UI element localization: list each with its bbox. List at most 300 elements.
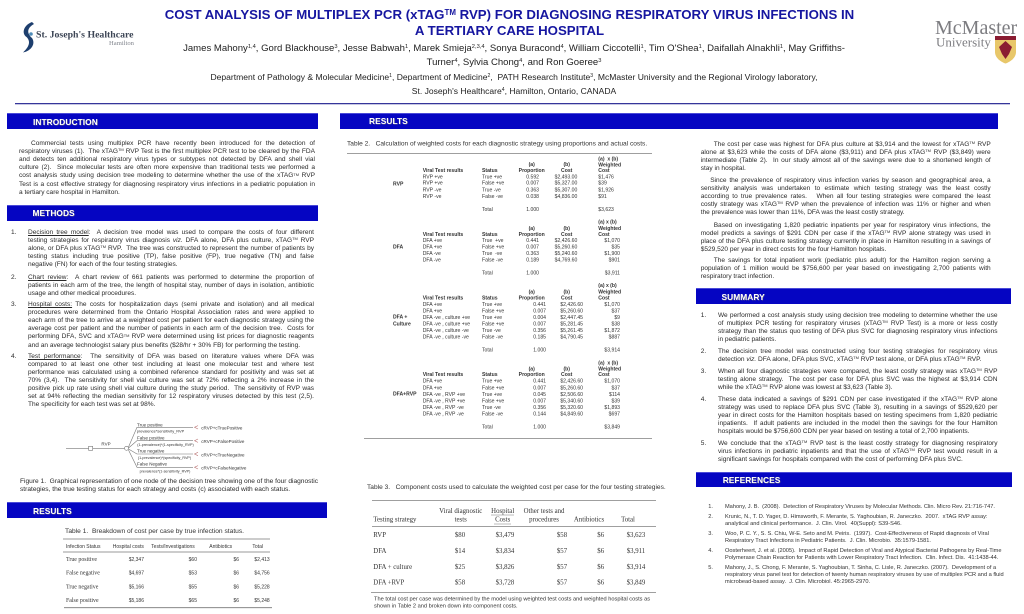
strategy RVP: 0.363 (526, 187, 539, 193)
table 3: component costs: $3,623 (627, 532, 646, 539)
figure 1: decision tree: True negative (137, 448, 165, 454)
strategy DFA plus RVP: DFA +ve (423, 379, 442, 385)
figure 1: decision tree: cRVP+cFalseNegative (201, 466, 247, 470)
strategy DFA plus culture: (b) (563, 289, 570, 295)
strategy DFA plus RVP: 0.144 (533, 411, 546, 417)
logo: McMaster University: McMaster (935, 17, 1018, 39)
table 1: breakdown of cost per case: $65 (189, 598, 197, 604)
strategy RVP: False -ve (482, 194, 503, 200)
summary item 5 (701, 439, 998, 463)
summary item 3 (701, 367, 998, 391)
method 2: chart review (11, 274, 314, 297)
strategy DFA: Total (482, 271, 493, 277)
strategy RVP: $3,623 (598, 207, 614, 213)
method 4: test performance: The specificity for each test was set at 98%. (28, 401, 155, 408)
method 4: test performance: performance was calculated using a combined reference standard for positivity and was set at (28, 369, 314, 376)
discussion paragraph 1: stay in hospital. (701, 165, 746, 172)
text: introduction: a tertiary care hospital in Hamilton. (19, 189, 120, 196)
strategy RVP (393, 156, 621, 213)
heading: summary (696, 288, 1011, 304)
table 3: component costs: $3,911 (627, 548, 645, 555)
logo: St. Joseph's Healthcare (23, 22, 135, 52)
strategy DFA: 0.441 (526, 238, 539, 244)
strategy DFA plus culture: $37 (612, 309, 620, 315)
summary item 2: 2. (701, 348, 706, 355)
discussion paragraph 2: Since the prevalence of respiratory virus infection varies by season and geographical area, a (710, 177, 991, 184)
method 1: decision tree model: negative (FN) for each of the four testing strategies. (28, 261, 178, 268)
strategy DFA plus culture: Total (482, 348, 493, 354)
table 1: breakdown of cost per case: False negative (66, 571, 100, 577)
reference 5: 5. (708, 565, 713, 571)
strategy DFA plus culture: $5,281.45 (560, 322, 583, 328)
strategy DFA: DFA +ve (423, 245, 442, 251)
heading: results centre (340, 112, 998, 128)
strategy DFA: $5,260.60 (555, 245, 577, 251)
table 1: breakdown of cost per case: $6 (233, 584, 239, 590)
strategy RVP: 0.592 (526, 174, 539, 180)
heading: introduction (7, 113, 318, 129)
figure 1: decision tree: cRVP+cFalsePositive (201, 439, 245, 444)
strategy DFA plus culture: False +ve (482, 322, 504, 328)
strategy DFA: 0.363 (526, 251, 539, 257)
strategy DFA plus RVP: (a) x (b) (598, 360, 618, 366)
strategy DFA: $2,426.60 (555, 238, 577, 244)
summary item 1: 1. (701, 312, 706, 319)
strategy DFA plus RVP: DFA -ve , RVP +ve (423, 398, 465, 404)
strategy DFA plus RVP: $3,849 (604, 424, 620, 430)
strategy DFA plus RVP: 0.441 (533, 379, 546, 385)
table 3: component costs: $25 (455, 564, 466, 571)
strategy DFA: False -ve (482, 258, 503, 264)
strategy RVP: (a) (529, 162, 535, 168)
figure 1 caption: Figure 1. Graphical representation of one node of the decision tree showing one of the four diagnostic (20, 478, 318, 485)
strategy RVP: (b) (563, 162, 570, 168)
method 4: test performance: 70% (3,4). The sensitivity for shell vial culture was set at 72% reflecting a 2% increase in the (28, 377, 314, 384)
method 4: test performance: 4. (11, 353, 16, 360)
method 3: hospital costs: average cost per patient and the number of patients in each arm of the decision tree. Costs for (28, 325, 314, 332)
strategy DFA: (a) x (b) (598, 220, 617, 226)
table 1: breakdown of cost per case: True positive (66, 557, 97, 563)
table 3: component costs: DFA +RVP (373, 580, 404, 586)
method 3: hospital costs (11, 301, 314, 349)
reference 1: 1. (708, 504, 713, 510)
table 1: breakdown of cost per case: $2,347 (129, 557, 144, 563)
strategy DFA plus culture: 0.356 (533, 328, 546, 334)
strategy DFA: Cost (561, 232, 573, 238)
summary item 5: significant savings for hospitals compared with the cost of performing DFA plus SVC. (718, 456, 963, 463)
summary item 5: virus infections in pediatric inpatients and that the use of xTAGTM RVP test would result in a (718, 447, 997, 455)
strategy RVP: $1,476 (598, 174, 614, 180)
strategy DFA plus RVP: True +ve (482, 392, 502, 398)
text: introduction: and detects ten additional respiratory virus types or subtypes not detected by DFA and shell vial (19, 156, 315, 163)
table 3: component costs: DFA (373, 548, 386, 555)
table 3: component costs: $57 (557, 580, 568, 586)
reference 4 (708, 548, 1002, 561)
summary item 2: The decision tree model was constructed using four testing strategies for respiratory virus (718, 348, 997, 355)
method 2: chart review: Chart review: A chart review of 661 patients was performed to determine the proportion of (28, 274, 314, 281)
table 1: breakdown of cost per case: $53 (189, 571, 197, 577)
strategy DFA: DFA (393, 244, 404, 250)
strategy DFA: Viral Test results (423, 232, 463, 238)
discussion paragraph 3 (700, 222, 991, 253)
strategy RVP: True -ve (482, 187, 501, 193)
reference 4: Oosterheert, J. et al. (2005). Impact of Rapid Detection of Viral and Atypical Bacterial Pathogens by Real-Time (725, 548, 1002, 554)
strategy DFA: Status (482, 232, 498, 238)
authors (183, 43, 845, 68)
strategy RVP: $1,926 (598, 187, 614, 193)
strategy DFA plus culture: True +ve (482, 315, 502, 321)
discussion paragraph 4 (701, 257, 991, 280)
strategy DFA: (a) (529, 226, 535, 232)
strategy DFA: True -ve (482, 251, 502, 257)
strategy DFA plus RVP: $697 (609, 411, 620, 417)
table 3: component costs: $14 (455, 548, 466, 555)
strategy DFA plus RVP: DFA +ve (423, 385, 442, 391)
method 1: decision tree model: Decision tree model: A decision tree model was used to compare the costs of four different (28, 229, 314, 236)
strategy DFA: $3,911 (605, 271, 620, 277)
strategy DFA plus RVP: $5,320.60 (560, 405, 583, 411)
heading: references: REFERENCES (723, 475, 780, 485)
summary item 1: in pediatric patients. (718, 336, 776, 343)
strategy DFA plus RVP: $4,849.60 (560, 411, 583, 417)
discussion paragraph 2 (700, 177, 991, 216)
method 4: test performance: Test performance: The sensitivity of DFA was based on literature values where DFA was (28, 353, 314, 360)
strategy RVP: False +ve (482, 181, 504, 187)
summary item 4 (700, 395, 998, 435)
strategy DFA plus culture: DFA -ve , culture +ve (423, 322, 470, 328)
summary item 3: When all four diagnostic strategies were compared, the least costly strategy was xTAGTM RVP (718, 367, 997, 375)
strategy RVP: Status (482, 168, 498, 174)
discussion paragraph 4: population of 1 million would be $756,600 per year based on investigating 2,700 patients with (701, 265, 991, 272)
discussion paragraph 3: place of the DFA plus culture testing strategy currently in place in Hamilton resulting in a savings of (701, 238, 991, 245)
reference 2: analytical and clinical performance. J. Clin. Virol. 40(Suppl): S39-S46. (725, 521, 902, 527)
table 2: weighted costs for each diagnostic strategy: Table 2. Calculation of weighted costs for each diagnostic strategy using proportions and actual costs. (347, 140, 647, 148)
table 1: breakdown of cost per case: $55 (189, 584, 197, 590)
method 1: decision tree model: alone, or DFA plus xTAGTM RVP. The tree was constructed to represent the number of patients by (28, 244, 314, 252)
table 1: breakdown of cost per case: $6 (233, 557, 239, 563)
strategy RVP: Cost (561, 168, 573, 174)
reference 3: Respiratory Tract Infections in Pediatric Patients. J. Clin. Microbio. 35:1579-1581. (725, 538, 931, 544)
strategy RVP: 0.038 (526, 194, 539, 200)
table 1: breakdown of cost per case (63, 528, 272, 608)
strategy DFA plus RVP: Cost (598, 372, 610, 378)
strategy DFA plus RVP (393, 360, 621, 430)
strategy DFA plus RVP: True -ve (482, 405, 501, 411)
heading: methods (6, 204, 318, 220)
reference 1: Mahony, J. B. (2008). Detection of Respiratory Viruses by Molecular Methods. Clin. Micro Rev. 21:716-747. (725, 504, 995, 510)
strategy DFA plus RVP: False +ve (482, 398, 504, 404)
figure 1: decision tree: (1-prevalence)*(specificity_RVP) (138, 456, 191, 460)
strategy DFA plus RVP: Status (482, 372, 498, 378)
title: A TERTIARY CARE HOSPITAL (415, 23, 604, 38)
table 1: breakdown of cost per case: $4,697 (129, 571, 144, 577)
strategy RVP: RVP +ve (423, 181, 443, 187)
method 3: hospital costs: procedures were determined from the Ontario Hospital Association rates and were applied to (28, 309, 314, 316)
figure 1 caption: strategies, the true testing status for each strategy and costs (c) associated with each status. (20, 486, 290, 493)
heading: results left: RESULTS (33, 506, 72, 516)
logo: McMaster University: University (936, 34, 991, 50)
summary item 4: year in direct costs for the Hamilton hospitals based on testing specimens from 1,820 pediatric (718, 412, 997, 419)
strategy DFA plus RVP: False +ve (482, 385, 504, 391)
table 3: component costs: DFA + culture (373, 564, 412, 571)
summary item 2: detection viz. DFA alone, DFA plus SVC, xTAGTM RVP test alone, or DFA plus xTAGTM RVP. (718, 355, 982, 363)
table 3: component costs: $58 (455, 580, 466, 586)
table 1: breakdown of cost per case: Antibiotics (209, 544, 233, 550)
strategy RVP: Cost (598, 168, 610, 174)
method 3: hospital costs: 3. (11, 301, 16, 308)
figure 1: decision tree: (1-prevalence)*(1-specificity_RVP) (137, 443, 194, 447)
table 1: breakdown of cost per case: $5,248 (254, 598, 270, 604)
strategy DFA plus culture: Proportion (519, 295, 545, 301)
strategy RVP: Total (482, 207, 493, 213)
strategy DFA plus RVP: $114 (609, 392, 620, 398)
strategy DFA plus culture: $1,872 (604, 328, 620, 334)
text: introduction: culture (2). Since molecular tests are often more expensive than traditional tests we performed a (19, 164, 315, 171)
strategy DFA plus RVP: False -ve (482, 411, 503, 417)
header divider rule (15, 103, 1010, 105)
method 1: decision tree model (11, 229, 314, 268)
strategy DFA plus RVP: 0.007 (533, 385, 546, 391)
summary item 2 (701, 348, 998, 363)
heading: results left (7, 502, 326, 518)
strategy DFA: $35 (612, 245, 620, 251)
strategy DFA plus culture: $2,447.45 (560, 315, 583, 321)
strategy DFA plus culture: $9 (614, 315, 620, 321)
strategy RVP: True +ve (482, 174, 502, 180)
affiliations: Department of Pathology & Molecular Medicine1, Department of Medicine2, PATH Research Institute3, McMaster University and the Regional Virology laboratory, (210, 72, 818, 82)
table 1: breakdown of cost per case: $5,228 (254, 584, 270, 590)
figure 1: decision tree: cRVP+cTruePositive (201, 426, 243, 430)
summary item 4: These data indicated a savings of $291 CDN per case investigated if the xTAGTM RVP alone (718, 395, 997, 403)
heading: methods: METHODS (32, 208, 75, 218)
strategy DFA plus culture: True +ve (482, 302, 502, 308)
strategy DFA plus RVP: Total (482, 424, 493, 430)
method 3: hospital costs: each arm of the tree to arrive at a weighted cost per patient for each diagnostic strategy using the (28, 317, 314, 324)
strategy DFA plus culture: $3,914 (604, 348, 620, 354)
strategy DFA: $4,769.60 (555, 258, 577, 264)
table 3: component costs: $6 (597, 564, 605, 571)
table 1: breakdown of cost per case: Total (252, 544, 263, 550)
strategy DFA plus culture: DFA + (393, 315, 407, 321)
table 1: breakdown of cost per case: False positive (66, 598, 99, 604)
table 3: component costs: $58 (557, 532, 568, 539)
strategy DFA plus culture: Weighted (598, 289, 621, 295)
figure 1: decision tree: True positive (137, 422, 163, 428)
reference 3 (708, 531, 989, 544)
reference 2: Krunic, N., T. D. Yager, D. Himsworth, F. Merante, S. Yaghoubian, R. Janeczko. 2007. xTAG RVP assay: (725, 514, 988, 520)
strategy DFA plus culture: False -ve (482, 335, 503, 341)
discussion paragraph 1 (701, 140, 991, 172)
strategy DFA plus RVP: $37 (612, 385, 620, 391)
strategy DFA plus culture: DFA -ve , culture -ve (423, 328, 469, 334)
strategy DFA plus culture: 0.004 (533, 315, 546, 321)
summary item 4: inpatients. If adult patients are included in the model then the savings for the four Hamilton (718, 420, 997, 427)
table 1: breakdown of cost per case: Tests/Investigations (151, 544, 195, 550)
summary item 3: testing alone strategy. The cost per case for DFA plus SVC was the highest at $3,914 CDN (718, 376, 997, 383)
discussion paragraph 1: intermediate (Table 2). In our study almost all of the savings were due to a shortened length of (701, 157, 991, 164)
method 4: test performance (11, 353, 314, 408)
figure 1: decision tree: False Negative (137, 462, 168, 466)
strategy DFA plus culture: Culture (393, 321, 411, 327)
strategy DFA plus RVP: $2,426.60 (560, 379, 583, 385)
strategy RVP: RVP (393, 182, 404, 188)
strategy RVP: RVP -ve (423, 187, 442, 193)
table 3: component costs: Testing strategy (373, 516, 417, 524)
method 1: decision tree model: testing status including true positive (TP), false positive (FP), true negative (TN) and false (28, 253, 314, 260)
strategy DFA plus culture: DFA +ve (423, 302, 442, 308)
reference 5 (708, 565, 1004, 585)
strategy DFA plus culture: $2,426.60 (560, 302, 583, 308)
strategy DFA: Weighted (598, 226, 621, 232)
summary item 5: We conclude that the xTAGTM RVP test is the least costly strategy for diagnosing respiratory (718, 439, 997, 447)
table 3: component costs: $6 (597, 532, 605, 539)
table 1: breakdown of cost per case: Hospital costs (113, 544, 144, 550)
strategy RVP: $39 (598, 181, 607, 187)
strategy DFA plus culture: (a) (529, 289, 535, 295)
strategy DFA plus culture: DFA +ve (423, 309, 442, 315)
heading: introduction: INTRODUCTION (33, 116, 98, 126)
heading: references (696, 472, 1012, 487)
summary item 1: We performed a cost analysis study using decision tree modeling to determine whether the use (718, 312, 997, 319)
method 3: hospital costs: and an average technologist salary plus benefits ($28/hr + 30% FB) for performing the testing. (28, 342, 300, 349)
summary item 1 (701, 312, 998, 343)
discussion paragraph 2: costly strategy was xTAGTM RVP when the prevalence of infection was 11% or higher and when (701, 200, 991, 208)
reference 4: 4. (708, 548, 713, 554)
strategy DFA: 1.000 (526, 271, 539, 277)
text: introduction: Commercial tests using multiplex PCR have recently been introduced for the detection of (31, 140, 315, 147)
authors: Turner4, Sylvia Chong4, and Ron Goeree3 (427, 57, 601, 68)
logo: St. Joseph's Healthcare: St. Joseph's Healthcare (36, 30, 134, 40)
strategy DFA plus culture: Viral Test results (423, 295, 463, 301)
discussion paragraph 3: model predicts a savings of $291 CDN per case if the xTAGTM RVP alone strategy was used in (701, 229, 991, 237)
table 1: breakdown of cost per case: True negative (66, 584, 99, 590)
summary item 1: strategy than the status quo testing of DFA plus SVC for diagnosing respiratory virus infections (718, 328, 997, 335)
summary item 3: while the xTAGTM RVP alone was lowest at $3,623 (Table 3). (718, 383, 893, 391)
strategy DFA plus culture: False +ve (482, 309, 504, 315)
discussion paragraph 3: $529,520 per year in direct costs for the four Hamilton hospitals. (701, 246, 886, 253)
strategy DFA plus RVP: Viral Test results (423, 372, 463, 378)
strategy DFA plus culture: Cost (598, 295, 610, 301)
summary item 5: 5. (701, 440, 706, 447)
strategy DFA plus RVP: DFA -ve , RVP -ve (423, 411, 464, 417)
discussion paragraph 2: sensitivity analysis was undertaken to estimate which testing strategy was the least costly (701, 185, 991, 192)
table 1: breakdown of cost per case: $5,166 (129, 584, 144, 590)
table 3: component costs: shown in Table 2 and broken down into component costs. (374, 604, 518, 610)
strategy DFA plus culture: True -ve (482, 328, 501, 334)
table 3: component costs: Total (621, 516, 635, 524)
strategy DFA plus RVP: (b) (563, 366, 570, 372)
strategy DFA plus RVP: DFA+RVP (393, 392, 417, 398)
table 3: component costs: $3,849 (627, 580, 646, 586)
strategy DFA plus culture: (a) x (b) (598, 283, 617, 289)
text: introduction (19, 140, 315, 196)
strategy DFA plus RVP: Proportion (519, 372, 545, 378)
strategy RVP: 1.000 (526, 207, 539, 213)
heading: summary: SUMMARY (722, 292, 765, 302)
figure 1: decision tree: RVP (101, 442, 111, 446)
table 1: breakdown of cost per case: $60 (189, 557, 197, 563)
strategy DFA plus culture: Cost (561, 295, 573, 301)
table 3: component costs: $3,826 (496, 564, 515, 571)
strategy DFA plus culture: DFA -ve , culture -ve (423, 335, 469, 341)
strategy RVP: Proportion (519, 168, 545, 174)
strategy DFA plus RVP: True +ve (482, 379, 502, 385)
reference 5: Mahony, J., S. Chong, F. Merante, S. Yaghoubian, T. Sinha, C. Lisle, R. Janeczko. (2007). Development of a (725, 565, 996, 571)
table 3: component costs: $3,834 (496, 548, 515, 555)
strategy DFA plus RVP: 1.000 (533, 424, 546, 430)
discussion paragraph 1: alone at $3,623 while the costs of DFA alone ($3,911) and DFA plus xTAGTM RVP ($3,849) were (701, 148, 991, 156)
strategy DFA plus culture: DFA -ve , culture +ve (423, 315, 470, 321)
table 3: component costs: $57 (557, 564, 568, 571)
reference 2 (708, 514, 988, 527)
strategy DFA plus RVP: Weighted (598, 366, 621, 372)
table 1: breakdown of cost per case: Infection Status (66, 544, 101, 550)
method 4: test performance: set at 94% reflecting the median sensitivity for 12 respiratory viruses detected by this test (2,5). (28, 393, 314, 400)
table 1: breakdown of cost per case: $4,756 (254, 571, 270, 577)
discussion paragraph 4: The savings for total inpatient work (pediatric plus adult) for the Hamilton region serving a (714, 257, 991, 264)
strategy DFA: 0.007 (526, 245, 539, 251)
table 1: breakdown of cost per case: $6 (233, 571, 239, 577)
table 3: component costs: Table 3. Component costs used to calculate the weighted cost per case for the four testing strategies. (367, 484, 666, 491)
table 3: component costs: Viral diagnostic (439, 508, 482, 515)
strategy DFA (393, 220, 621, 277)
strategy DFA plus culture: 0.185 (533, 335, 546, 341)
strategy RVP: $5,327.00 (555, 181, 577, 187)
logo: McMaster University (935, 17, 1018, 64)
affiliations (210, 72, 818, 96)
strategy DFA plus culture: 1.000 (533, 348, 546, 354)
strategy DFA plus culture: $5,261.45 (560, 328, 583, 334)
figure 1 caption (20, 478, 318, 493)
strategy DFA: $1,070 (604, 238, 620, 244)
table 3: component costs: Hospital (491, 508, 514, 515)
strategy RVP: $5,307.00 (555, 187, 577, 193)
strategy DFA plus RVP: 0.007 (533, 398, 546, 404)
figure 1: decision tree (66, 422, 247, 474)
table 3: component costs (367, 484, 666, 610)
summary item 3: 3. (701, 368, 706, 375)
summary item 4: 4. (701, 396, 706, 403)
strategy DFA: DFA +ve (423, 238, 442, 244)
table 3: component costs: Other tests and (524, 508, 565, 515)
table 3: component costs: $3,728 (496, 580, 515, 586)
strategy DFA plus culture: 0.007 (533, 309, 546, 315)
strategy DFA plus RVP: DFA -ve , RVP +ve (423, 392, 465, 398)
method 1: decision tree model: 1. (11, 229, 16, 236)
strategy DFA plus RVP: $2,506.60 (560, 392, 583, 398)
text: introduction: respiratory viruses (1). The xTAGTM RVP Test is the first multiplex PCR test to be cleared by the FDA (19, 147, 315, 155)
strategy DFA: True +ve (482, 238, 504, 244)
strategy DFA plus RVP: $1,893 (604, 405, 620, 411)
method 2: chart review: 2. (11, 274, 16, 281)
strategy DFA plus culture: Status (482, 295, 498, 301)
heading: results centre: RESULTS (369, 116, 408, 126)
strategy DFA plus RVP: (a) (529, 366, 535, 372)
strategy RVP: (a) x (b) (598, 156, 618, 162)
method 2: chart review: usage and other medical procedures. (28, 290, 136, 297)
strategy RVP: Viral Test results (423, 168, 463, 174)
title: COST ANALYSIS OF MULTIPLEX PCR (xTAGTM RVP) FOR DIAGNOSING RESPIRATORY VIRUS INFECTIONS IN (165, 7, 854, 22)
table 3: component costs: procedures (529, 516, 559, 524)
table 2: weighted costs for each diagnostic strategy (347, 140, 652, 438)
strategy DFA: DFA -ve (423, 258, 441, 264)
table 1: breakdown of cost per case: Table 1. Breakdown of cost per case by true infection status. (65, 528, 244, 535)
summary item 4: hospitals would be $756,600 CDN per year based on testing a total of 2,700 inpatients. (718, 428, 969, 435)
table 3: component costs: RVP (373, 532, 386, 539)
strategy DFA plus culture: 0.441 (533, 302, 546, 308)
strategy DFA plus RVP: 0.045 (533, 392, 546, 398)
summary item 1: of multiplex PCR testing for respiratory viruses (xTAGTM RVP Test) is a more or less costly (718, 319, 997, 327)
